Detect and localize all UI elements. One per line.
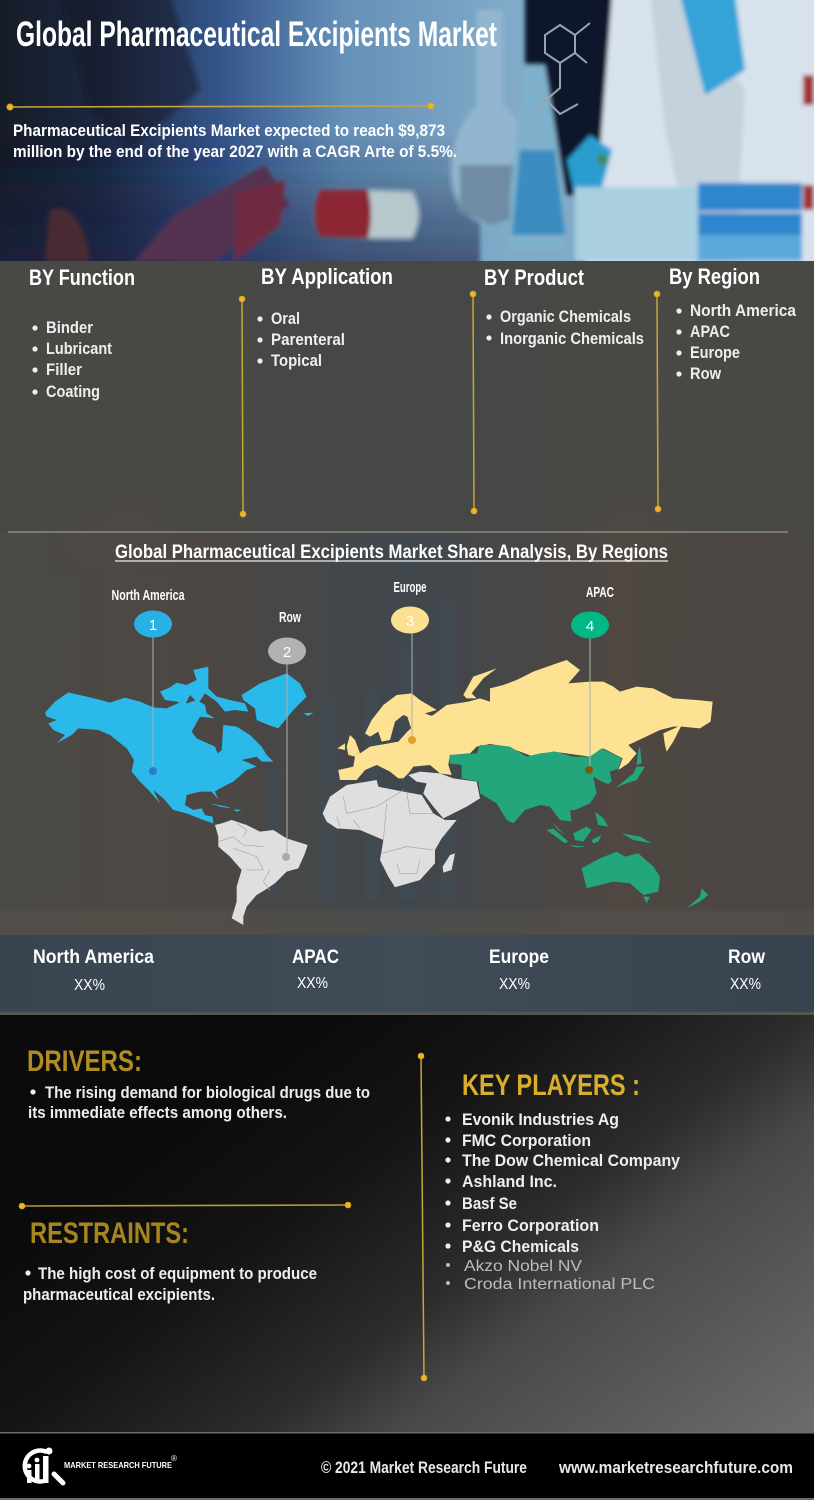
panel: BY Application: Topical [271,351,322,370]
panel: restraints: pharmaceutical excipients. [23,1285,215,1304]
panel: BY Function: Coating [46,382,100,401]
panel: restraints: The high cost of equipment to produce [38,1264,317,1283]
panel: regional share values: Europe [489,947,549,968]
marker 4: APAC [571,584,614,774]
panel: BY Function [29,265,135,401]
panel: BY Product: BY Product [484,265,585,290]
hero background: laboratory photo [0,0,814,266]
world map [45,660,713,925]
marker 1: North America [112,587,185,775]
marker 1: North America: 1 [149,617,157,634]
panel: key players: Akzo Nobel NV [464,1258,582,1275]
logo: Market Research Future: ® [171,1454,177,1463]
panel: key players: FMC Corporation [462,1131,591,1150]
panel: BY Product: Inorganic Chemicals [500,329,644,348]
summary text [13,121,457,161]
panel: key players: P&G Chemicals [462,1237,579,1256]
marker 3: Europe [391,579,429,744]
panel: By Region: By Region [669,264,760,289]
panel: drivers: its immediate effects among others. [28,1103,287,1122]
marker 4: APAC: APAC [586,584,614,601]
marker 3: Europe: 3 [406,613,414,630]
panel: regional share values [0,935,814,1015]
panel: segmentation background and map background [0,261,814,950]
panel: By Region: APAC [690,322,730,341]
panel: restraints: RESTRAINTS: [30,1217,189,1250]
panel: BY Application: Parenteral [271,330,345,349]
panel: key players: Croda International PLC [464,1276,655,1293]
panel: drivers [27,1045,370,1122]
summary text: Pharmaceutical Excipients Market expected to reach $9,873 [13,121,445,140]
panel: By Region: Row [690,364,722,383]
copyright: © 2021 Market Research Future [321,1458,527,1477]
vertical gold separator [418,1053,427,1381]
panel: BY Function: BY Function [29,265,135,290]
panel: By Region [669,264,796,383]
title: Global Pharmaceutical Excipients Market [16,15,497,54]
region: Eurasia, Africa and Oceania shapes [323,660,713,908]
panel: key players: Ashland Inc. [462,1172,557,1191]
panel: regional share values: XX% [74,977,105,994]
panel: drivers: The rising demand for biological drugs due to [45,1083,370,1102]
panel: restraints [23,1217,317,1304]
panel: BY Product [484,265,644,348]
panel: drivers: DRIVERS: [27,1045,142,1078]
gold divider [19,1202,351,1209]
panel: BY Application [257,264,393,370]
panel: By Region: North America [690,301,796,320]
panel: BY Function: Binder [46,318,93,337]
marker 4: APAC: 4 [586,618,594,635]
marker 3: Europe: Europe [394,579,426,596]
panel: BY Product: Organic Chemicals [500,307,631,326]
panel: BY Function: Filler [46,360,82,379]
panel: regional share values: APAC [292,947,339,968]
marker 2: Row [268,609,306,861]
panel: key players: Evonik Industries Ag [462,1110,619,1129]
panel: key players: Ferro Corporation [462,1216,599,1235]
marker 1: North America: North America [112,587,185,604]
panel: regional share values: XX% [499,976,530,993]
panel: By Region: Europe [690,343,740,362]
panel: key players [445,1069,681,1293]
map heading: Global Pharmaceutical Excipients Market Share Analysis, By Regions [115,542,668,563]
panel: drivers, restraints and key players background [0,1015,814,1433]
website: www.marketresearchfuture.com [558,1458,793,1477]
panel: key players: The Dow Chemical Company [462,1151,681,1170]
summary text: million by the end of the year 2027 with a CAGR Arte of 5.5%. [13,142,457,161]
panel: regional share values: Row [728,947,765,968]
panel: key players: KEY PLAYERS : [462,1069,640,1102]
marker 2: Row: 2 [283,644,291,661]
panel: BY Application: BY Application [261,264,393,289]
region: North America and South America shapes [45,667,313,925]
panel: regional share values: XX% [730,976,761,993]
footer bar [0,1432,814,1500]
panel: BY Application: Oral [271,309,300,328]
panel: BY Function: Lubricant [46,339,112,358]
marker 2: Row: Row [279,609,301,626]
panel: regional share values: XX% [297,975,328,992]
gold divider with dots [6,102,434,110]
panel: regional share values: North America [33,947,154,968]
panel: key players: Basf Se [462,1194,517,1213]
vertical gold separators [239,291,661,517]
logo: Market Research Future: MARKET RESEARCH FUTURE [64,1460,172,1470]
logo: Market Research Future [25,1448,177,1483]
